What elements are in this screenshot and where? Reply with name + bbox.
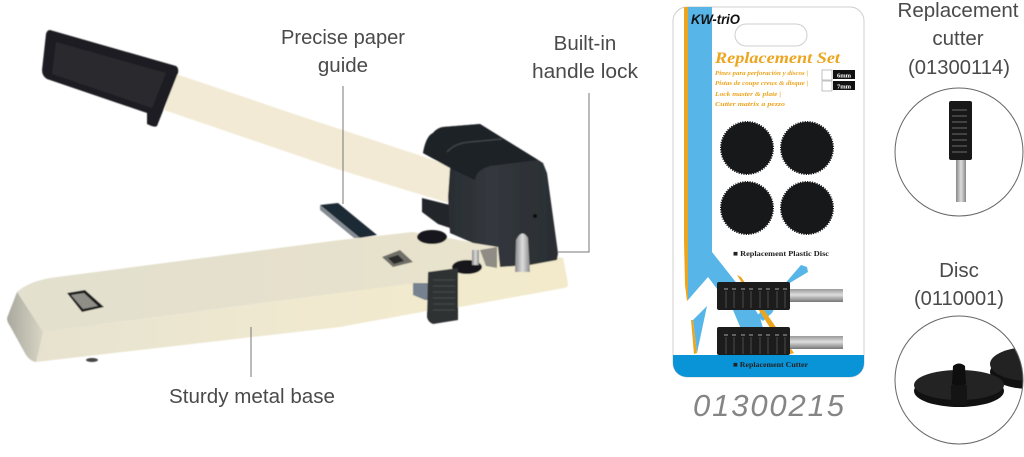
card background graphic [673,7,864,377]
card description [714,71,808,108]
size options: 6mm [837,72,852,80]
base window [382,250,413,267]
hanging hole [735,24,807,46]
callout: built-in handle lock: handle lock [532,60,639,83]
callout: built-in handle lock [532,32,639,252]
card heading: Replacement Set [714,50,841,67]
punch head [422,124,558,268]
black handle grip [42,30,178,127]
label text: Built-in [554,32,616,55]
replacement set blister card [673,7,864,377]
two cutters [717,282,843,355]
panel: disc: (0110001) [914,287,1004,310]
disc caption: ■ Replacement Plastic Disc [733,249,830,258]
panel: replacement cutter: (01300114) [908,56,1010,79]
icon: cutter [949,101,972,202]
punch discs on base [417,230,482,274]
panel: replacement cutter [895,0,1023,216]
cutter caption: ■ Replacement Cutter [733,360,809,369]
size options [822,70,855,91]
card description: Pistas de coupe creux & disque | [715,81,808,87]
label text: Sturdy metal base [169,385,335,408]
card description: Lock master & plate | [714,92,781,98]
handle lock pin [515,233,530,272]
brand logo: KW-triO [691,11,740,27]
side lever knob [413,268,458,324]
brand badge [67,290,104,312]
callout: precise paper guide [281,26,405,204]
hole punch product photo [7,30,568,362]
metal base [7,232,568,362]
product number: 01300215 [693,388,845,423]
card description: Cutter matrix a pezzo [715,102,785,108]
heading: Disc [939,259,979,282]
four plastic discs [721,122,833,234]
paper guide [320,203,377,238]
panel: replacement cutter: cutter [932,27,984,50]
panel: disc [895,259,1024,444]
card description: Pines para perforación y discos | [715,71,808,77]
icon: discs [914,347,1024,407]
handle arm [164,74,452,204]
size options: 7mm [837,84,852,90]
callout: precise paper guide: guide [318,54,368,77]
label text: Precise paper [281,26,405,49]
